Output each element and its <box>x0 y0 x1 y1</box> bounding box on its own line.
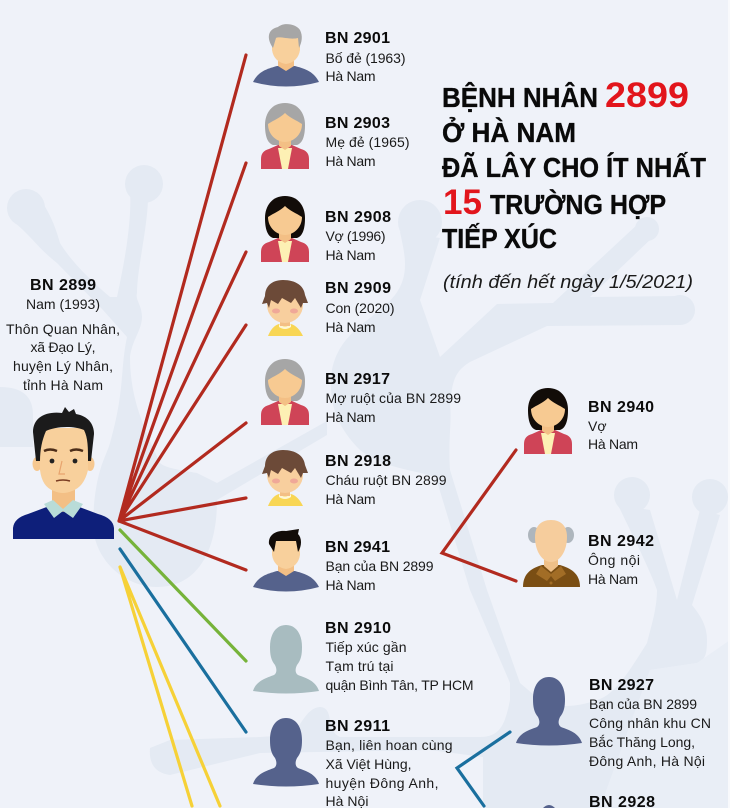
patient: BN 2911: Bạn, liên hoan cùng <box>326 737 452 753</box>
patient: BN 2927: Đông Anh, Hà Nội <box>589 753 705 769</box>
patient: BN 2928 <box>543 794 655 808</box>
patient: BN 2940: Vợ <box>588 418 607 434</box>
patient: BN 2927: Công nhân khu CN <box>589 715 711 731</box>
patient: BN 2911: huyện Đông Anh, <box>326 775 438 791</box>
index patient BN 2899 text: BN 2899 <box>30 277 96 294</box>
index patient BN 2899 text: huyện Lý Nhân, <box>13 358 113 374</box>
patient: BN 2942: BN 2942 <box>588 533 654 550</box>
patient: BN 2911: Xã Việt Hùng, <box>326 756 412 772</box>
connector: BN 2941 to contacts <box>442 450 516 581</box>
patient: BN 2917: BN 2917 <box>325 371 390 388</box>
title: TIẾP XÚC <box>442 223 557 254</box>
patient: BN 2909 <box>262 280 394 336</box>
patient: BN 2908 <box>261 196 391 263</box>
title: TRƯỜNG HỢP <box>490 189 666 220</box>
patient: BN 2940: Hà Nam <box>588 436 638 452</box>
patient: BN 2911 <box>253 718 452 808</box>
patient: BN 2941: Bạn của BN 2899 <box>326 558 434 574</box>
patient: BN 2918: BN 2918 <box>325 453 391 470</box>
patient: BN 2908: Vợ (1996) <box>326 228 386 244</box>
patient: BN 2942: Hà Nam <box>588 571 638 587</box>
index patient portrait <box>13 407 114 539</box>
title: 2899 <box>605 76 689 115</box>
index patient BN 2899 text <box>6 277 120 393</box>
patient: BN 2909: Con (2020) <box>326 300 394 316</box>
patient: BN 2901: Bố đẻ (1963) <box>326 50 406 66</box>
title: 15 <box>443 183 482 222</box>
patient: BN 2917: Hà Nam <box>326 409 376 425</box>
patient: BN 2909: BN 2909 <box>325 280 391 297</box>
patient: BN 2911: BN 2911 <box>325 718 390 735</box>
index patient BN 2899 text: Nam (1993) <box>26 296 100 312</box>
patient: BN 2940 <box>524 388 654 454</box>
patient: BN 2927: BN 2927 <box>589 677 654 694</box>
index patient BN 2899 text: tỉnh Hà Nam <box>23 377 103 393</box>
title <box>442 76 706 254</box>
patient: BN 2901: Hà Nam <box>326 68 376 84</box>
patient: BN 2918: Cháu ruột BN 2899 <box>326 472 447 488</box>
title: BỆNH NHÂN <box>442 82 598 113</box>
index patient BN 2899 text: Thôn Quan Nhân, <box>6 321 120 337</box>
patient: BN 2942 <box>523 520 654 587</box>
patient: BN 2927: Bạn của BN 2899 <box>589 696 697 712</box>
patient: BN 2941: BN 2941 <box>325 539 390 556</box>
patient: BN 2941: Hà Nam <box>326 577 376 593</box>
patient: BN 2942: Ông nội <box>588 552 640 568</box>
patient: BN 2910: BN 2910 <box>325 620 391 637</box>
patient: BN 2908: Hà Nam <box>326 247 376 263</box>
patient: BN 2908: BN 2908 <box>325 209 391 226</box>
patient: BN 2909: Hà Nam <box>326 319 376 335</box>
patient: BN 2941 <box>253 529 434 593</box>
patient: BN 2918: Hà Nam <box>326 491 376 507</box>
patient: BN 2903: Hà Nam <box>326 153 376 169</box>
patient: BN 2927: Bắc Thăng Long, <box>589 734 695 750</box>
index patient BN 2899 text: xã Đạo Lý, <box>30 339 96 355</box>
connector: BN 2911 to contacts <box>457 732 510 806</box>
patient: BN 2901: BN 2901 <box>325 30 390 47</box>
patient: BN 2910 <box>253 620 474 694</box>
subtitle date: (tính đến hết ngày 1/5/2021) <box>443 271 693 292</box>
connector lines from BN 2899 <box>119 55 246 806</box>
patient: BN 2910: Tiếp xúc gần <box>326 639 406 655</box>
patient: BN 2910: Tạm trú tại <box>326 658 394 674</box>
patient: BN 2917: Mợ ruột của BN 2899 <box>326 390 461 406</box>
patient: BN 2903 <box>261 103 410 169</box>
lower right virus body <box>600 640 730 808</box>
patient: BN 2903: Mẹ đẻ (1965) <box>326 134 410 150</box>
patient: BN 2901 <box>253 24 406 86</box>
right edge strip <box>728 0 730 808</box>
title: ĐÃ LÂY CHO ÍT NHẤT <box>442 152 706 183</box>
virus background shapes <box>0 165 728 808</box>
title: Ở HÀ NAM <box>442 116 576 148</box>
patient: BN 2918 <box>262 450 447 507</box>
patient: BN 2940: BN 2940 <box>588 399 654 416</box>
patient: BN 2927 <box>516 677 711 769</box>
patient: BN 2917 <box>261 359 461 425</box>
patient: BN 2910: quận Bình Tân, TP HCM <box>326 677 474 693</box>
patient: BN 2903: BN 2903 <box>325 115 390 132</box>
